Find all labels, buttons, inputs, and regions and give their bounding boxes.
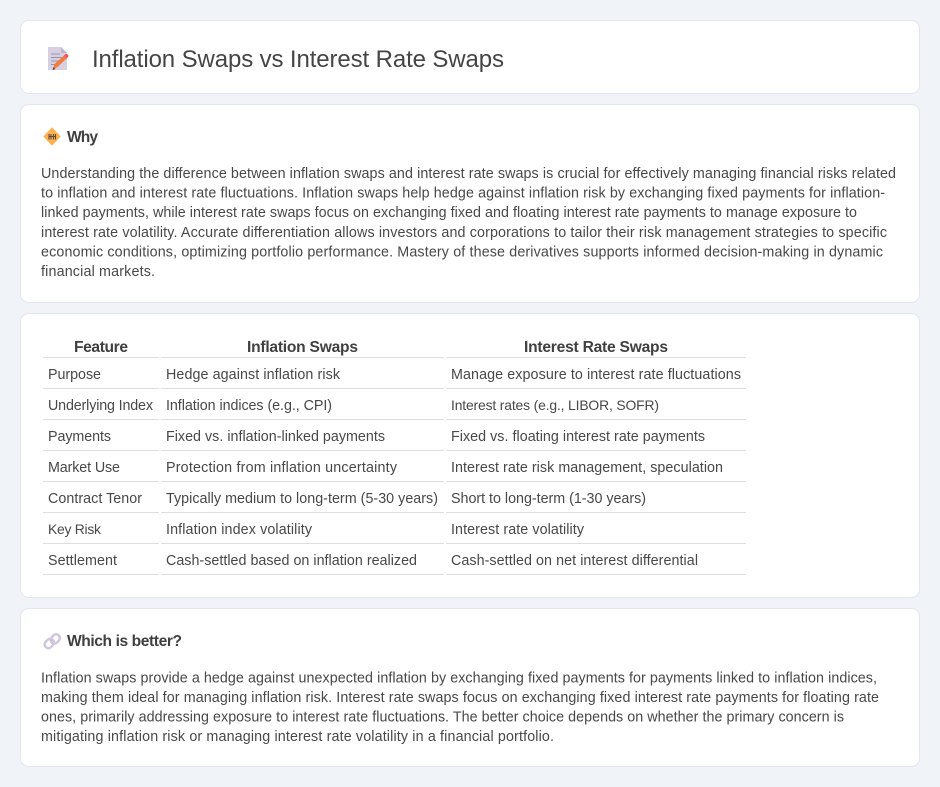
- row: contract tenor: [48, 491, 646, 507]
- row: payments: Fixed vs. inflation-linked payments: [166, 429, 385, 445]
- row: purpose: Manage exposure to interest rate fluctuations: [451, 367, 741, 383]
- row: settlement: Cash-settled on net interest differential: [451, 553, 698, 569]
- text block: why paragraph: to inflation and interest rate fluctuations. Inflation swaps help hedge against inflation risk by exchanging fixed payments for inflation-: [41, 186, 885, 202]
- text block: why paragraph: [41, 166, 896, 280]
- row: payments: Payments: [48, 429, 111, 445]
- icon: memo with pencil: [48, 47, 68, 70]
- table header: [74, 339, 668, 356]
- row: market use: Protection from inflation uncertainty: [166, 460, 398, 476]
- text block: which is better paragraph: [41, 670, 879, 745]
- heading: which is better: Which is better?: [67, 633, 182, 650]
- row: purpose: [48, 367, 741, 383]
- row: contract tenor: Contract Tenor: [48, 491, 142, 507]
- row: market use: Market Use: [48, 460, 120, 476]
- table header: Feature: [74, 339, 128, 356]
- row: settlement: [48, 553, 698, 569]
- text block: why paragraph: Understanding the difference between inflation swaps and interest rate swaps is crucial for effectively managing financial risks related: [41, 166, 896, 182]
- text block: why paragraph: linked payments, while interest rate swaps focus on exchanging fixed and floating interest rate payments to manage exposure to: [41, 205, 857, 221]
- title text: Inflation Swaps vs Interest Rate Swaps: [92, 46, 504, 73]
- row: purpose: Purpose: [48, 367, 101, 383]
- row: payments: Fixed vs. floating interest rate payments: [451, 429, 705, 445]
- table header: Inflation Swaps: [247, 339, 358, 356]
- row: settlement: Settlement: [48, 553, 117, 569]
- text block: which is better paragraph: ones, primarily addressing exposure to interest rate fluctuations. The better choice depends on whether the primary concern is: [41, 710, 844, 726]
- row: key risk: Inflation index volatility: [166, 522, 313, 538]
- row: market use: [48, 460, 723, 476]
- table header: Interest Rate Swaps: [524, 339, 668, 356]
- row: key risk: Interest rate volatility: [451, 522, 585, 538]
- text block: which is better paragraph: mitigating inflation risk or managing interest rate volatility in a financial portfolio.: [41, 729, 554, 745]
- row: contract tenor: Typically medium to long-term (5-30 years): [166, 491, 438, 507]
- text block: which is better paragraph: Inflation swaps provide a hedge against unexpected inflation by exchanging fixed payments for payments linked to inflation indices,: [41, 670, 877, 686]
- panel: which is better: [20, 608, 920, 766]
- row: settlement: Cash-settled based on inflation realized: [166, 553, 417, 569]
- row: underlying index: Underlying Index: [48, 398, 153, 414]
- text block: which is better paragraph: making them ideal for managing inflation risk. Interest rate swaps focus on exchanging fixed interest rate payments for floating rate: [41, 690, 879, 706]
- row: payments: [48, 429, 705, 445]
- panel: why: [20, 104, 920, 302]
- row: purpose: Hedge against inflation risk: [166, 367, 341, 383]
- row: underlying index: Interest rates (e.g., LIBOR, SOFR): [451, 397, 659, 413]
- heading: why: Why: [67, 129, 98, 146]
- row: underlying index: [48, 397, 659, 414]
- text block: why paragraph: interest rate volatility. Accurate differentiation allows investors and corporations to tailor their risk management strategies to specific: [41, 225, 887, 241]
- row: underlying index: Inflation indices (e.g., CPI): [166, 398, 332, 414]
- table rules: [43, 357, 746, 575]
- panel: title: [20, 20, 920, 94]
- row: key risk: [48, 521, 585, 538]
- text block: why paragraph: economic conditions, optimizing portfolio performance. Mastery of these derivatives supports informed decision-making in dynamic: [41, 244, 883, 260]
- row: market use: Interest rate risk management, speculation: [451, 460, 723, 476]
- panel: comparison table: [20, 314, 920, 598]
- row: contract tenor: Short to long-term (1-30 years): [451, 491, 646, 507]
- icon: link: [43, 633, 61, 650]
- row: key risk: Key Risk: [48, 521, 101, 537]
- text block: why paragraph: financial markets.: [41, 264, 155, 280]
- icon: diamond sign: [44, 128, 60, 145]
